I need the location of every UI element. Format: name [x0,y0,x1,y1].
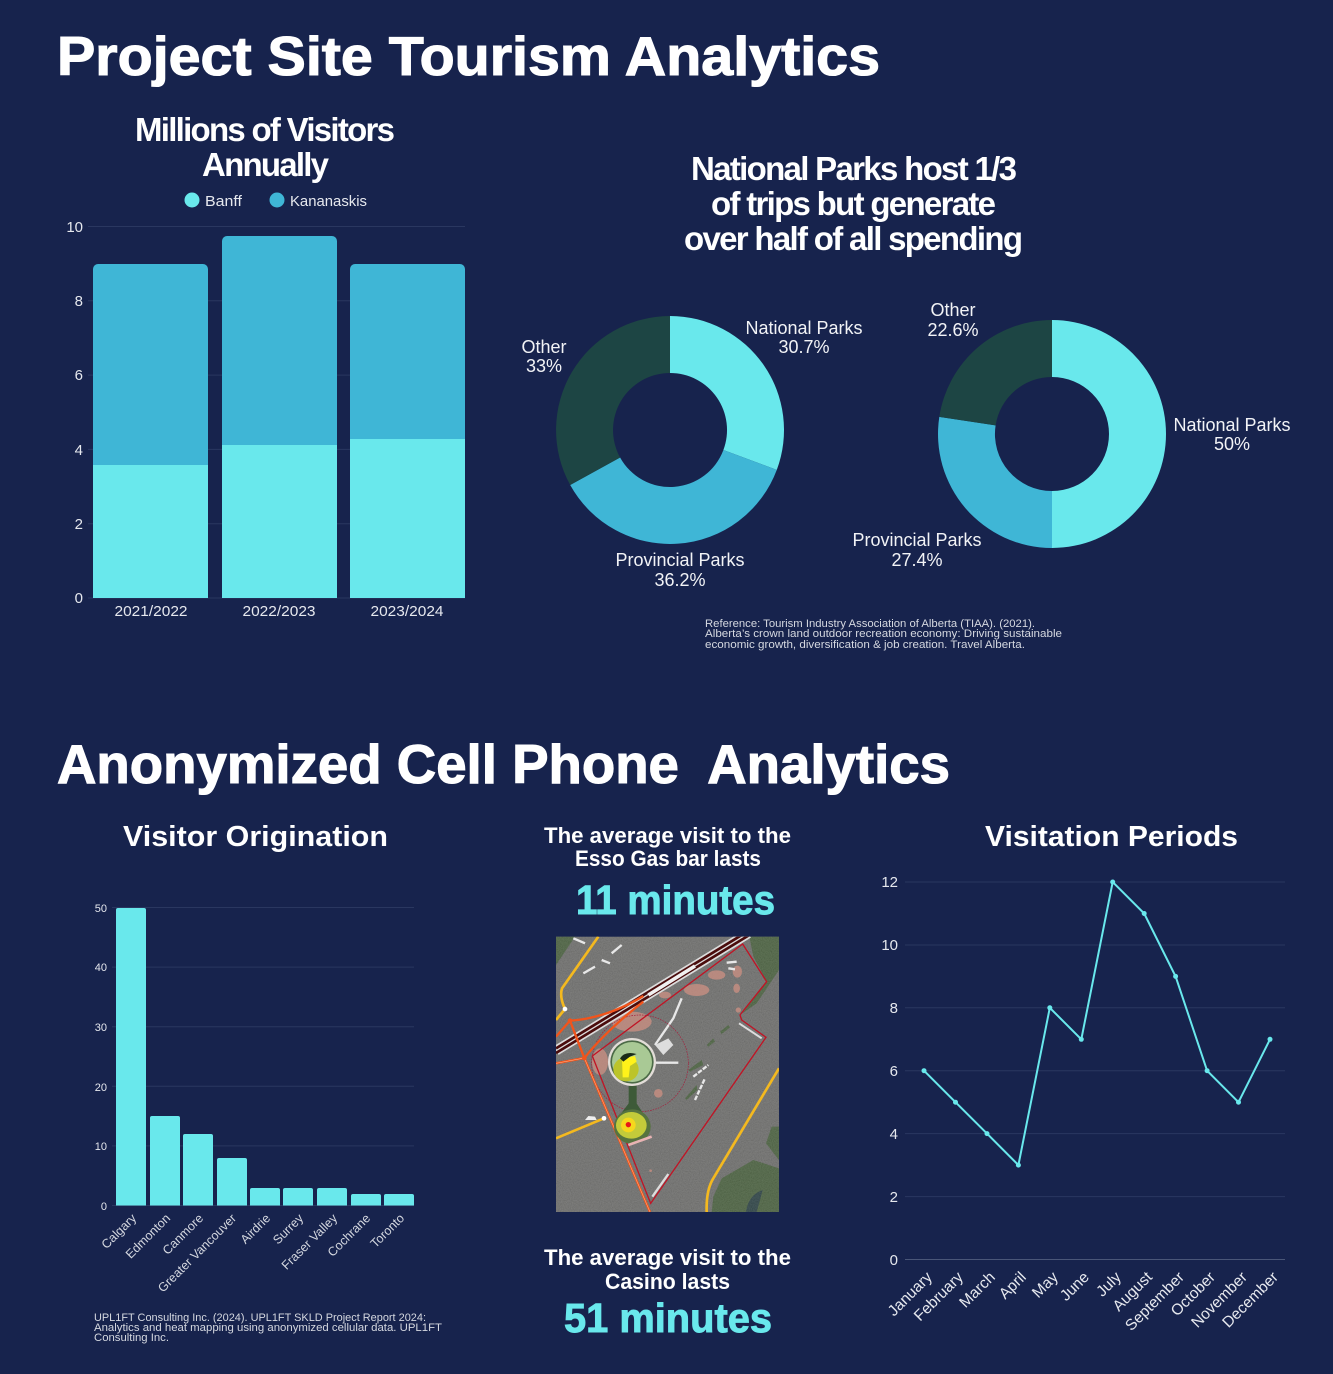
x axis labels: June [1057,1269,1093,1305]
panel: millions of visitors stacked bar chart [66,111,465,620]
orange roads [556,996,650,1212]
heading: national parks: of trips but generate [711,185,996,222]
donut chart: share of spending: 22.6% [927,320,979,340]
y axis labels: 0 [101,1201,107,1213]
donut chart: share of spending: 27.4% [891,550,943,570]
site boundary [592,944,767,1203]
bars [116,908,414,1206]
x axis labels: March [956,1269,999,1311]
y axis labels: 20 [95,1082,107,1094]
x axis labels: Calgary [99,1211,140,1252]
reference note: TIAA [705,618,1062,651]
x axis labels: 2023/2024 [370,603,444,620]
callout: casino visit [544,1245,791,1341]
pale disturbed ground [592,966,742,1172]
y axis labels: 12 [881,874,898,891]
heading: national parks: over half of all spending [684,220,1023,257]
x axis labels: Canmore [160,1211,206,1257]
callout: Esso gas bar visit: 11 minutes [576,877,775,923]
y axis labels [95,903,107,1213]
x axis labels [885,1268,1282,1334]
callout: casino visit: Casino lasts [605,1269,730,1294]
x axis labels: December [1219,1269,1282,1331]
donut chart: share of trips: 30.7% [778,337,830,357]
x axis labels: 2021/2022 [114,603,188,620]
donut chart: share of trips: National Parks [745,318,863,338]
y axis labels [881,874,898,1269]
y axis labels: 0 [75,590,83,607]
x axis labels: Surrey [270,1211,307,1247]
heading: millions of visitors: Annually [202,146,330,183]
y axis labels [66,219,83,607]
reference note: TIAA: economic growth, diversification & job creation. Travel Alberta. [705,639,1025,651]
heading: millions of visitors: Millions of Visitors [135,111,395,148]
callout: Esso gas bar visit: The average visit to the [544,823,791,848]
donut chart: share of spending [852,300,1291,570]
x axis labels [114,603,444,620]
reference note: UPL1FT [94,1312,442,1344]
callout: casino visit: The average visit to the [544,1245,791,1270]
heading: visitor origination: Visitor Origination [123,821,388,853]
line series [922,880,1272,1168]
x axis labels: Fraser Valley [279,1211,341,1273]
x axis labels: Cochrane [325,1211,373,1259]
x axis labels: May [1029,1269,1062,1302]
white structures [573,938,737,1100]
x axis labels: November [1188,1269,1251,1331]
title: Project Site Tourism Analytics: Project Site Tourism Analytics [57,25,880,87]
y axis labels: 4 [890,1126,898,1143]
y axis labels: 4 [75,442,83,459]
title: Anonymized Cell Phone Analytics: Anonymized Cell Phone Analytics [57,733,950,795]
y axis labels: 10 [881,937,898,954]
highway [556,933,748,1051]
x axis labels: October [1168,1269,1219,1320]
x axis labels: September [1122,1269,1188,1334]
panel: visitor origination bar chart [95,903,414,1295]
bars: Banff [93,439,465,598]
y axis labels: 50 [95,903,107,915]
y axis labels: 10 [66,219,83,236]
map: heat map of project site [556,931,779,1212]
reference note: TIAA: Reference: Tourism Industry Association of Alberta (TIAA). (2021). [705,618,1035,630]
y axis labels: 2 [890,1189,898,1206]
x axis labels: April [996,1269,1030,1303]
donut chart: share of trips: Provincial Parks [615,550,745,570]
donut chart: share of trips [521,316,863,590]
reference note: UPL1FT: Analytics and heat mapping using anonymized cellular data. UPL1FT [94,1322,442,1334]
donut chart: share of spending: Other [930,300,976,320]
y axis labels: 8 [890,1000,898,1017]
donut chart: share of spending: 50% [1214,434,1250,454]
y axis labels: 10 [95,1141,107,1153]
x axis labels [99,1211,407,1295]
y axis labels: 8 [75,293,83,310]
x axis labels: January [885,1269,936,1320]
y axis labels: 0 [890,1252,898,1269]
callout: Esso gas bar visit [544,823,791,923]
heading: visitation periods: Visitation Periods [985,821,1238,853]
y axis labels: 40 [95,962,107,974]
donut chart: share of spending: Provincial Parks [852,530,982,550]
reference note: UPL1FT: Consulting Inc. [94,1332,169,1344]
heading: millions of visitors [135,111,395,183]
reference note: TIAA: Alberta’s crown land outdoor recreation economy: Driving sustainable [705,628,1062,640]
bars: Kananaskis [93,236,465,465]
reference note: UPL1FT: UPL1FT Consulting Inc. (2024). UPL1FT SKLD Project Report 2024: [94,1312,426,1324]
road labels [648,966,695,995]
forest patches [556,937,779,1212]
donut chart: share of spending: National Parks [1173,415,1291,435]
y axis labels: 6 [75,367,83,384]
callout: Esso gas bar visit: Esso Gas bar lasts [575,846,761,871]
donut chart: share of trips: 33% [526,356,562,376]
x axis labels: Greater Vancouver [155,1211,239,1295]
heat spots [622,1086,642,1113]
x axis labels: July [1093,1269,1125,1300]
y axis labels: 30 [95,1022,107,1034]
donut chart: share of trips: Other [521,337,567,357]
x axis labels: Airdrie [238,1211,273,1247]
donut chart: share of trips: 36.2% [654,570,706,590]
y axis labels: 6 [890,1063,898,1080]
y axis labels: 2 [75,516,83,533]
x axis labels: Toronto [368,1211,407,1251]
legend [184,192,367,210]
x axis labels: 2022/2023 [242,603,316,620]
heading: national parks: National Parks host 1/3 [691,150,1017,187]
x axis labels: February [911,1269,967,1325]
heading: national parks [684,150,1023,257]
yellow roads [556,937,779,1212]
panel: visitation periods line chart [881,874,1285,1334]
x axis labels: August [1110,1268,1156,1315]
legend: Kananaskis [290,193,367,210]
x axis labels: Edmonton [123,1211,173,1261]
legend: Banff [205,193,243,210]
callout: casino visit: 51 minutes [564,1295,772,1341]
